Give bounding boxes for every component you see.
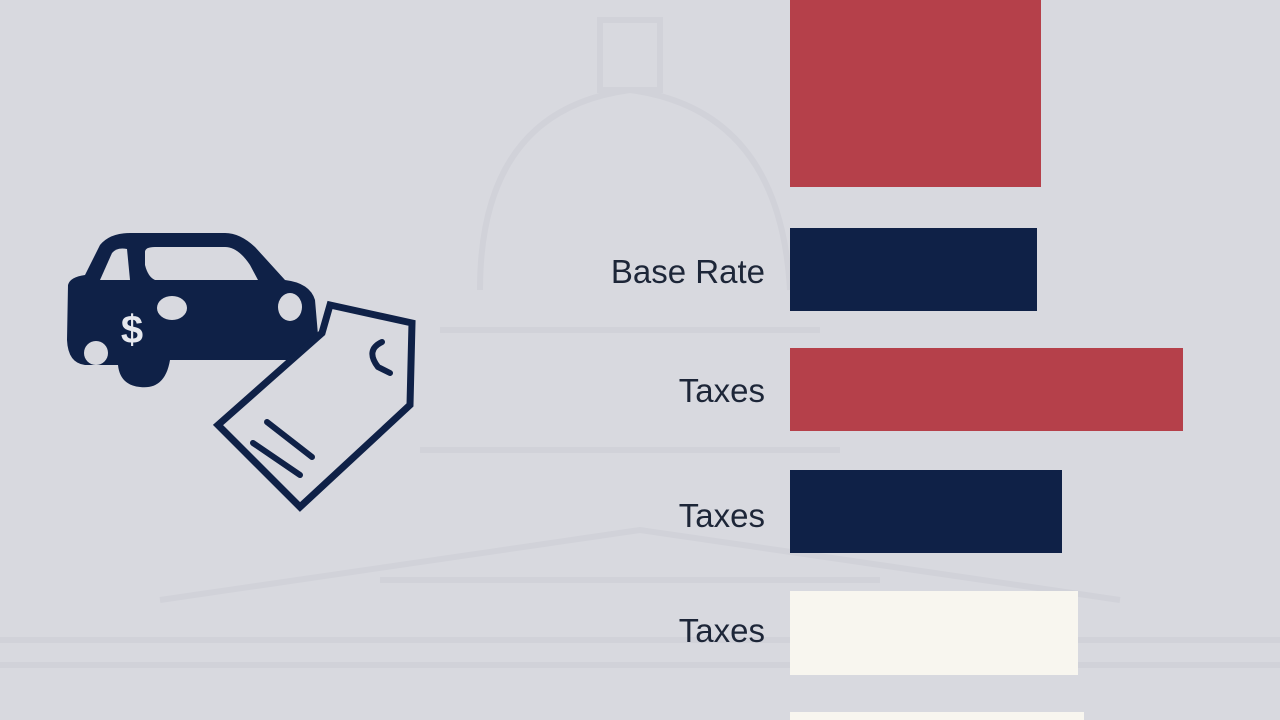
bar: taxes 2 bbox=[790, 470, 1062, 553]
label: Taxes 3: Taxes bbox=[679, 612, 765, 649]
label: Base Rate: Base Rate bbox=[611, 253, 765, 290]
price tag bbox=[218, 305, 412, 507]
bar: partial bottom bbox=[790, 712, 1084, 720]
bar: taxes 1 bbox=[790, 348, 1183, 431]
bar chart bbox=[611, 0, 1183, 720]
car body bbox=[67, 233, 318, 387]
label: Taxes 2: Taxes bbox=[679, 497, 765, 534]
bar: base rate bbox=[790, 228, 1037, 311]
label: Taxes 1: Taxes bbox=[679, 372, 765, 409]
bar: taxes 3 bbox=[790, 591, 1078, 675]
dollar sign: $ bbox=[121, 308, 143, 352]
icon: car with price tag bbox=[67, 233, 416, 512]
bar: red top bbox=[790, 0, 1041, 187]
